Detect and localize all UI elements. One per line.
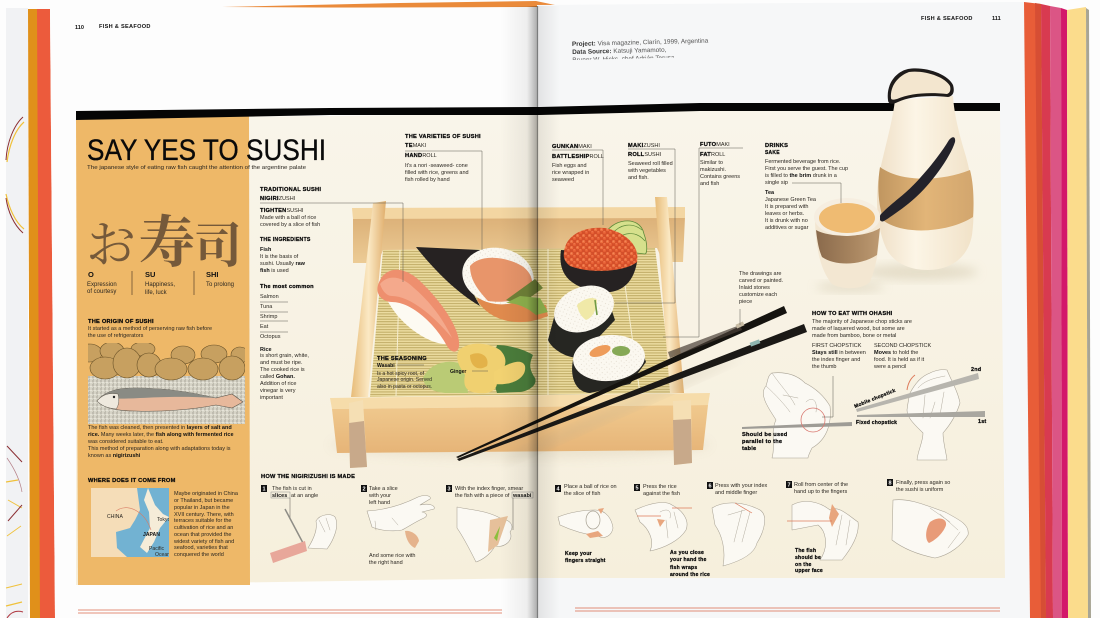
step 2: left hand bbox=[369, 500, 390, 506]
origin map text: terraces suitable for the bbox=[174, 518, 231, 524]
page headers bbox=[75, 16, 1001, 31]
step 2: with your bbox=[368, 493, 391, 499]
origin map text bbox=[173, 491, 239, 558]
varieties: makizushi: Seaweed roll filled bbox=[628, 161, 673, 167]
traditional sushi column: TRADITIONAL SUSHI bbox=[260, 187, 321, 193]
step 1: slices bbox=[272, 493, 287, 499]
the seasoning bbox=[377, 356, 488, 390]
right hand holding second chopstick: Mobile chopstick bbox=[854, 388, 897, 410]
step 5: 5 bbox=[635, 486, 639, 492]
ginger and wasabi garnish bbox=[423, 344, 536, 393]
origin of sushi text: It started as a method of perserving raw fish before bbox=[88, 326, 212, 332]
title: SAY YES TO SUSHI bbox=[87, 134, 326, 167]
left book cover with ribbon arcs bbox=[6, 8, 28, 618]
project credits: Data Source: Katsuji Yamamoto, bbox=[572, 47, 667, 56]
step 7: on the bbox=[795, 562, 812, 568]
traditional sushi column: Fish bbox=[260, 247, 272, 253]
the seasoning: also in pasta or octopus. bbox=[377, 384, 432, 390]
step 4 bbox=[555, 484, 617, 564]
varieties: futomaki: FATROLL bbox=[700, 152, 725, 158]
traditional sushi column: called Gohan. bbox=[260, 374, 295, 380]
origin map text: conquered the world bbox=[174, 552, 224, 558]
drawings note: The drawings are bbox=[739, 271, 782, 277]
the seasoning: Is a hot spicy root, of bbox=[377, 371, 425, 377]
drinks text bbox=[765, 143, 848, 231]
varieties: futomaki: Contains greens bbox=[700, 174, 740, 180]
varieties: makizushi: ROLLSUSHI bbox=[628, 152, 662, 158]
the seasoning: THE SEASONING bbox=[377, 356, 427, 362]
step 1: 1 bbox=[262, 486, 266, 492]
how to eat with ohashi text bbox=[812, 311, 931, 370]
varieties: temaki bbox=[405, 134, 482, 250]
varieties: temaki: HANDROLL bbox=[405, 153, 437, 159]
how to eat with ohashi text: the thumb bbox=[812, 364, 836, 370]
step 5: your hand the bbox=[670, 557, 707, 563]
origin map text: XVII century. There, with bbox=[174, 512, 234, 518]
traditional sushi column: The most common bbox=[260, 284, 314, 290]
origin of sushi body text: known as nigirizushi bbox=[88, 453, 141, 459]
varieties: makizushi bbox=[615, 143, 675, 303]
kanji meanings: of courtesy bbox=[87, 289, 116, 295]
traditional sushi column: and must be ripe. bbox=[260, 360, 303, 366]
step 7: upper face bbox=[795, 568, 823, 574]
origin of sushi body text bbox=[87, 425, 234, 459]
varieties: temaki: fish rolled by hand bbox=[405, 177, 450, 183]
how to eat with ohashi text: SECOND CHOPSTICK bbox=[874, 343, 931, 349]
the seasoning: Ginger bbox=[450, 369, 466, 375]
black header bar bbox=[76, 103, 1000, 120]
origin map text: ocean that provided the bbox=[174, 532, 232, 538]
the seasoning: Japanese origin. Served bbox=[377, 377, 432, 383]
the seasoning: Wasabi bbox=[377, 363, 395, 369]
how to eat with ohashi text: Moves to hold the bbox=[874, 350, 918, 356]
step 5: As you close bbox=[670, 550, 704, 556]
origin map text: seafood, varieties that bbox=[174, 545, 228, 551]
step 4: 4 bbox=[556, 486, 560, 492]
varieties: temaki: filled with rice, greens and bbox=[405, 170, 469, 176]
traditional sushi column: vinegar is very bbox=[260, 388, 296, 394]
footer rules bbox=[78, 608, 1000, 613]
step 1: at an angle bbox=[291, 493, 318, 499]
right hand holding second chopstick: 1st bbox=[978, 419, 986, 425]
drawings note bbox=[739, 271, 783, 325]
origin map text: widest variety of fish and bbox=[173, 539, 234, 545]
kanji meanings: SHI bbox=[206, 270, 219, 279]
left hand holding first chopstick: parallel to the bbox=[742, 439, 782, 445]
sake jug and cup photo bbox=[814, 68, 978, 292]
step 7: should be bbox=[795, 555, 821, 561]
traditional sushi column: is short grain, white, bbox=[260, 353, 309, 359]
right hand holding second chopstick: 2nd bbox=[971, 367, 981, 373]
map of China and Japan: CHINA bbox=[107, 514, 123, 520]
drinks text: It is drunk with no bbox=[765, 218, 808, 224]
step 8 bbox=[887, 479, 968, 558]
step 6: 6 bbox=[708, 484, 712, 490]
step 1 bbox=[261, 485, 337, 563]
step 5: around the rice bbox=[670, 572, 710, 578]
left hand holding first chopstick bbox=[742, 373, 852, 458]
maki rolls bbox=[547, 277, 647, 393]
step 6: Press with your index bbox=[715, 483, 768, 489]
step 2 bbox=[361, 485, 434, 566]
drinks text: Japanese Green Tea bbox=[765, 197, 817, 203]
origin of sushi body text: was considered suitable to eat. bbox=[87, 439, 164, 445]
drinks text: First you serve the guest. The cup bbox=[765, 166, 848, 172]
step 5: against the fish bbox=[643, 491, 680, 497]
step 7: hand up to the fingers bbox=[794, 489, 847, 495]
step 3: the fish with a piece of bbox=[455, 493, 510, 499]
step 7 bbox=[786, 481, 858, 574]
step 5: fish wraps bbox=[670, 565, 697, 571]
kanji brush calligraphy: 寿 bbox=[139, 199, 195, 279]
how to eat with ohashi text: The majority of Japanese chop sticks are bbox=[812, 319, 912, 325]
how to eat with ohashi text: HOW TO EAT WITH OHASHI bbox=[812, 311, 893, 317]
how to eat with ohashi text: made from bamboo, bone or metal bbox=[812, 333, 896, 339]
step 4: the slice of fish bbox=[564, 491, 600, 497]
traditional sushi column: TIGHTENSUSHI bbox=[260, 208, 304, 214]
varieties: temaki: THE VARIETIES OF SUSHI bbox=[405, 134, 481, 140]
traditional sushi column: Eat bbox=[260, 324, 269, 330]
drinks text: Tea bbox=[765, 190, 775, 196]
step 6: and middle finger bbox=[715, 490, 757, 496]
traditional sushi column: Shrimp bbox=[260, 314, 277, 320]
kanji brush calligraphy: 司 bbox=[194, 207, 242, 276]
traditional sushi column bbox=[260, 187, 403, 401]
drinks text: additives or sugar bbox=[765, 225, 809, 231]
map of China and Japan: Pacific bbox=[149, 546, 164, 552]
step 4: Keep your bbox=[565, 551, 592, 557]
traditional sushi column: important bbox=[260, 395, 283, 401]
kanji meanings: life, luck bbox=[145, 290, 168, 296]
traditional sushi column: Tuna bbox=[260, 304, 273, 310]
step 8: 8 bbox=[888, 480, 892, 486]
top orange page edge bbox=[222, 1, 555, 8]
traditional sushi column: THE INGREDIENTS bbox=[260, 237, 311, 243]
left coloured page edges bbox=[28, 9, 55, 618]
varieties: temaki: It's a nori -seaweed- cone bbox=[405, 163, 468, 169]
project credits: Bruner W. Hicks, chef Adrián Terusa bbox=[572, 54, 675, 64]
map of China and Japan: JAPAN bbox=[143, 532, 160, 538]
drinks text: single sip bbox=[765, 180, 788, 186]
traditional sushi column: fish is used bbox=[260, 268, 289, 274]
kanji meanings: To prolong bbox=[206, 282, 234, 288]
page headers: FISH & SEAFOOD bbox=[921, 16, 973, 22]
drinks text: It is prepared with bbox=[765, 204, 808, 210]
step 3: With the index finger, smear bbox=[455, 486, 523, 492]
how to eat with ohashi text: made of laquered wood, but some are bbox=[812, 326, 905, 332]
project credits bbox=[572, 38, 708, 60]
traditional sushi column: covered by a slice of fish bbox=[260, 222, 320, 228]
drinks text: DRINKS bbox=[765, 143, 788, 149]
where does it come from heading: WHERE DOES IT COME FROM bbox=[88, 478, 176, 484]
step 4: Place a ball of rice on bbox=[564, 484, 617, 490]
origin map text: Maybe originated in China bbox=[174, 491, 239, 497]
step 4: fingers straight bbox=[565, 558, 606, 564]
map of China and Japan: Tokyo bbox=[157, 517, 170, 523]
step 3: wasabi bbox=[512, 493, 532, 499]
sushi tray photo bbox=[330, 197, 710, 468]
varieties: temaki: TEMAKI bbox=[405, 143, 427, 149]
origin of sushi body text: The fish was cleaned, then presented in layers of salt and bbox=[88, 425, 232, 431]
varieties: gunkan: rice wrapped in bbox=[552, 170, 589, 176]
step 2: And some rice with bbox=[369, 553, 415, 559]
step 2: Take a slice bbox=[369, 486, 398, 492]
kanji meanings: O bbox=[88, 270, 94, 279]
page headers: 111 bbox=[992, 16, 1001, 22]
right coloured page edges bbox=[1024, 2, 1091, 618]
varieties: gunkan: Fish eggs and bbox=[552, 163, 587, 169]
varieties: futomaki: and fish bbox=[700, 181, 719, 187]
lacquered chopsticks bbox=[456, 306, 807, 467]
varieties: gunkan: BATTLESHIPROLL bbox=[552, 154, 604, 160]
temaki hand roll bbox=[416, 241, 548, 322]
traditional sushi column: NIGIRIZUSHI bbox=[260, 196, 296, 202]
ochre left column panel bbox=[76, 116, 250, 585]
traditional sushi column: sushi. Usually raw bbox=[260, 261, 306, 267]
step 8: the sushi is uniform bbox=[896, 487, 944, 493]
kanji meanings: SU bbox=[145, 270, 155, 279]
varieties: futomaki: makizushi. bbox=[700, 167, 726, 173]
step 3: 3 bbox=[447, 486, 451, 492]
traditional sushi column: It is the basis of bbox=[260, 254, 299, 260]
drinks text: leaves or herbs. bbox=[765, 211, 805, 217]
right hand holding second chopstick bbox=[854, 367, 986, 460]
left hand holding first chopstick: table bbox=[742, 446, 756, 452]
map of China and Japan: Ocean bbox=[155, 552, 170, 558]
step 6 bbox=[707, 482, 768, 566]
drawings note: customize each bbox=[739, 292, 777, 298]
right page bbox=[537, 2, 1030, 618]
drawings note: carved or painted. bbox=[739, 278, 783, 284]
origin map text: popular in Japan in the bbox=[174, 505, 230, 511]
drawings note: piece bbox=[739, 299, 752, 305]
project credits: Project: Visa magazine, Clarín, 1999, Argentina bbox=[572, 38, 709, 48]
varieties: futomaki: FUTOMAKI bbox=[700, 142, 730, 148]
origin map text: cultivation of rice and an bbox=[174, 525, 233, 531]
origin of sushi body text: rice. Many weeks later, the fish along with fermented rice bbox=[88, 432, 234, 438]
drinks text: is filled to the brim drunk in a bbox=[765, 173, 838, 179]
how to eat with ohashi text: were a pencil bbox=[873, 364, 906, 370]
step 7: Roll from center of the bbox=[794, 482, 848, 488]
step 7: 7 bbox=[787, 482, 791, 488]
traditional sushi column: The cooked rice is bbox=[260, 367, 305, 373]
nigirizushi heading: HOW THE NIGIRIZUSHI IS MADE bbox=[261, 474, 355, 480]
map of China and Japan bbox=[91, 488, 170, 558]
drawings note: Inlaid stones bbox=[739, 285, 770, 291]
step 3 bbox=[446, 485, 533, 562]
illustration: fish preserved under stones bbox=[78, 342, 249, 424]
step 8: Finally, press again so bbox=[896, 480, 950, 486]
varieties: futomaki: Similar to bbox=[700, 160, 723, 166]
left page bbox=[50, 7, 536, 618]
origin map text: or Thailand, but became bbox=[174, 498, 233, 504]
how to eat with ohashi text: FIRST CHOPSTICK bbox=[812, 343, 862, 349]
subtitle: The japanese style of eating raw fish caught the attention of the argentine palate bbox=[87, 165, 306, 171]
kanji meanings bbox=[87, 270, 234, 296]
varieties: futomaki bbox=[663, 142, 743, 337]
gunkan maki with salmon roe bbox=[560, 221, 647, 292]
origin of sushi text: THE ORIGIN OF SUSHI bbox=[88, 319, 154, 325]
how to eat with ohashi text: food. It is held as if it bbox=[874, 357, 925, 363]
step 5 bbox=[634, 484, 710, 578]
page headers: FISH & SEAFOOD bbox=[99, 24, 151, 30]
origin of sushi body text: This method of preparation along with adaptations today is bbox=[88, 446, 231, 452]
right hand holding second chopstick: Fixed chopstick bbox=[856, 420, 897, 426]
left hand holding first chopstick: Should be used bbox=[742, 432, 788, 438]
step 7: The fish bbox=[795, 548, 816, 554]
traditional sushi column: Addition of rice bbox=[260, 381, 296, 387]
varieties: gunkan: GUNKANMAKI bbox=[552, 144, 592, 150]
varieties: makizushi: and fish. bbox=[628, 175, 649, 181]
how to eat with ohashi text: the index finger and bbox=[812, 357, 860, 363]
step 5: Press the rice bbox=[643, 484, 677, 490]
gutter shadow bbox=[500, 6, 560, 618]
traditional sushi column: Octopus bbox=[260, 334, 281, 340]
nigiri sushi bbox=[377, 270, 459, 352]
page headers: 110 bbox=[75, 25, 84, 31]
traditional sushi column: Salmon bbox=[260, 294, 279, 300]
varieties: makizushi: with vegetables bbox=[627, 168, 666, 174]
origin of sushi text: the use of refrigerators bbox=[88, 333, 144, 339]
varieties: gunkan bbox=[552, 144, 604, 225]
kanji meanings: Happiness, bbox=[145, 282, 175, 288]
kanji meanings: Expression bbox=[87, 282, 117, 288]
cream infographic background bbox=[76, 110, 1005, 585]
step 2: the right hand bbox=[369, 560, 403, 566]
drinks text: SAKE bbox=[765, 150, 780, 156]
drinks text: Fermented beverage from rice. bbox=[765, 159, 841, 165]
step 1: The fish is cut in bbox=[272, 486, 312, 492]
varieties: makizushi: MAKIZUSHI bbox=[628, 143, 660, 149]
kanji brush calligraphy: お bbox=[86, 205, 136, 277]
traditional sushi column: Made with a ball of rice bbox=[260, 215, 316, 221]
traditional sushi column: Rice bbox=[260, 347, 272, 353]
origin of sushi text bbox=[88, 319, 212, 339]
varieties: gunkan: seaweed bbox=[552, 177, 574, 183]
kanji brush calligraphy bbox=[86, 199, 242, 279]
step 2: 2 bbox=[362, 486, 366, 492]
how to eat with ohashi text: Stays still in between bbox=[812, 350, 866, 356]
